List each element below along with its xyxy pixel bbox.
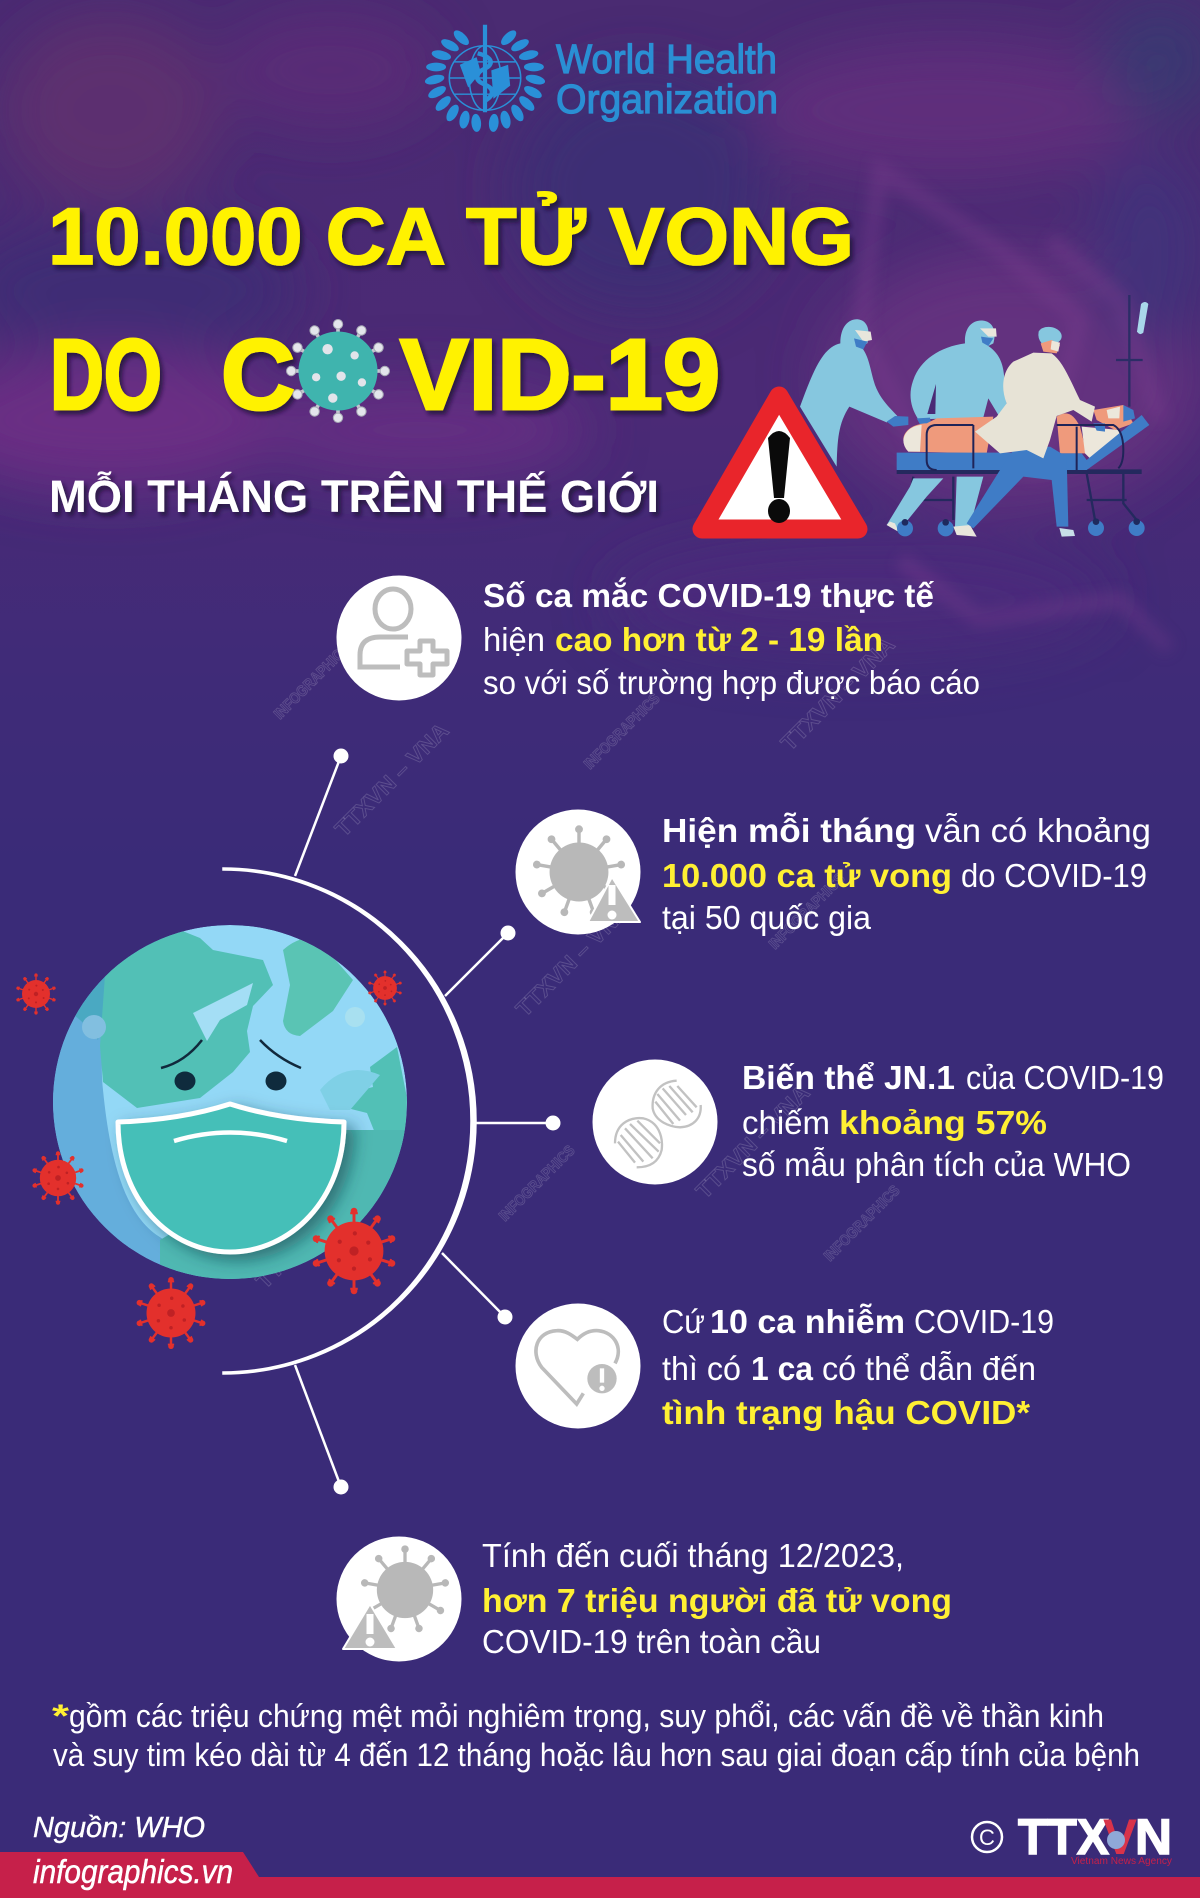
watermarks: INFOGRAPHICS <box>581 690 664 773</box>
footnote <box>52 1698 1140 1773</box>
logo: TTXVN: N <box>1135 1809 1172 1865</box>
icon: user plus <box>360 589 447 675</box>
watermarks: TTXVN – VNA <box>330 718 454 842</box>
nurse head <box>1038 327 1062 343</box>
text: của COVID-19 <box>966 1059 1164 1096</box>
text: khoảng 57% <box>839 1104 1047 1141</box>
source: Nguồn: WHO <box>33 1812 205 1844</box>
stretcher rails <box>927 425 1123 470</box>
text: Tính đến cuối tháng 12/2023, <box>482 1537 904 1574</box>
illustration: medical staff with stretcher <box>800 295 1149 537</box>
title: C <box>221 319 295 431</box>
footnote: và suy tim kéo dài từ 4 đến 12 tháng hoặc lâu hơn sau giai đoạn cấp tính của bệnh <box>53 1737 1140 1773</box>
text <box>482 1537 952 1660</box>
text <box>742 1059 1164 1183</box>
footer banner: infographics.vn <box>33 1853 233 1890</box>
footnote: gồm các triệu chứng mệt mỏi nghiêm trọng, suy phổi, các vấn đề về thần kinh <box>69 1698 1104 1734</box>
icon: virus warning <box>343 1545 450 1649</box>
item 4 <box>516 1303 1054 1431</box>
watermarks: INFOGRAPHICS <box>766 870 849 953</box>
text: tình trạng hậu COVID* <box>662 1394 1030 1431</box>
staff 2 legs <box>955 477 983 527</box>
logo: TTXVN: V <box>1103 1809 1138 1865</box>
text: COVID-19 <box>914 1303 1054 1340</box>
IV pole <box>1116 295 1143 407</box>
icon: coronavirus as letter O <box>287 320 389 422</box>
text: số mẫu phân tích của WHO <box>742 1146 1131 1183</box>
text: 1 ca <box>751 1350 814 1387</box>
text: hiện <box>483 621 545 658</box>
watermarks: TTXVN – VNA <box>251 1170 375 1294</box>
title: DO <box>50 319 162 431</box>
watermarks: TTXVN – VNA <box>691 1080 815 1204</box>
watermarks: INFOGRAPHICS <box>496 1142 579 1225</box>
wheels <box>897 520 1145 536</box>
text: so với số trường hợp được báo cáo <box>483 664 980 701</box>
watermarks: INFOGRAPHICS <box>821 1182 904 1265</box>
text: chiếm <box>742 1104 830 1141</box>
text: 10 ca nhiễm <box>710 1303 905 1340</box>
subtitle: MỖI THÁNG TRÊN THẾ GIỚI <box>49 471 659 522</box>
item 1 <box>336 576 980 701</box>
logo: TTXVN: C <box>979 1825 995 1850</box>
watermarks: INFOGRAPHICS <box>271 640 354 723</box>
watermarks: TTXVN – VNA <box>511 898 635 1022</box>
organisation name: World Health <box>556 36 777 82</box>
text: do COVID-19 <box>961 857 1147 894</box>
item 5 <box>336 1536 952 1662</box>
staff 2 <box>911 321 1007 419</box>
footnote: * <box>52 1698 70 1734</box>
item 3 <box>592 1059 1164 1184</box>
staff 1 <box>800 319 897 467</box>
icon: heart alert <box>536 1331 618 1404</box>
staff 1 legs <box>887 478 943 532</box>
text: cao hơn từ 2 - 19 lần <box>555 621 883 658</box>
logo: TTXVN <box>972 1809 1172 1867</box>
organisation name <box>556 36 778 122</box>
title: 10.000 CA TỬ VONG <box>48 191 854 282</box>
icon: virus warning <box>532 825 640 922</box>
watermarks: TTXVN – VNA <box>776 632 900 756</box>
text: Cứ <box>662 1303 705 1340</box>
icon: WHO emblem <box>424 25 546 134</box>
organisation name: Organization <box>556 76 778 122</box>
text: vẫn có khoảng <box>925 812 1151 849</box>
footer banner <box>0 1852 1200 1898</box>
watermarks <box>251 632 904 1294</box>
text: có thể dẫn đến <box>822 1350 1036 1387</box>
nurse coat <box>975 353 1095 458</box>
text <box>662 1303 1054 1431</box>
icon: DNA helix <box>615 1081 701 1167</box>
title <box>48 191 854 431</box>
illustration: masked globe <box>53 925 407 1279</box>
text: COVID-19 trên toàn cầu <box>482 1623 821 1660</box>
icon: face mask <box>118 1104 344 1252</box>
text: Biến thể JN.1 <box>742 1059 955 1096</box>
text: thì có <box>662 1350 741 1387</box>
text: Hiện mỗi tháng <box>662 812 916 849</box>
logo: World Health Organization <box>424 25 778 134</box>
patient <box>903 417 993 453</box>
background <box>0 0 1200 670</box>
icons: red viruses <box>16 970 402 1349</box>
logo: TTXVN: TTX <box>1018 1809 1109 1865</box>
text: Số ca mắc COVID-19 thực tế <box>483 577 935 614</box>
stretcher mattress <box>897 415 1149 470</box>
stretcher legs <box>897 472 1142 520</box>
text: hơn 7 triệu người đã tử vong <box>482 1582 952 1619</box>
title: VID-19 <box>400 319 720 431</box>
text <box>483 577 980 701</box>
text <box>662 812 1151 936</box>
text: tại 50 quốc gia <box>662 899 872 936</box>
text: 10.000 ca tử vong <box>662 857 952 894</box>
globe connector arc and lines <box>223 748 560 1494</box>
item 2 <box>516 810 1151 936</box>
nurse legs <box>967 447 1068 528</box>
icon: warning triangle <box>702 396 858 529</box>
logo: TTXVN: Vietnam News Agency <box>1071 1856 1172 1867</box>
icon: sad brows and eyes <box>161 1040 301 1090</box>
